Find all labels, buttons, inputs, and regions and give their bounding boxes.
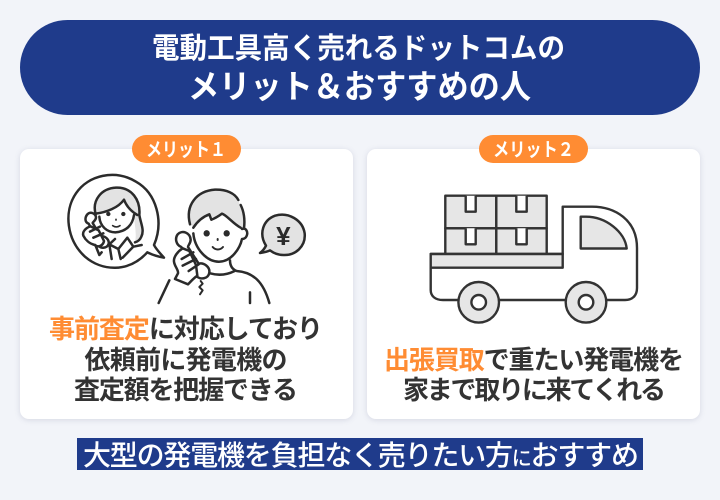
icon: man on the phone: [159, 190, 269, 303]
panel: merit 2: [367, 135, 700, 419]
rear wheel: [566, 282, 606, 323]
header banner: [20, 20, 700, 115]
truck bed: [431, 254, 563, 268]
cargo boxes: [445, 196, 547, 254]
text: merit 2 description: [384, 345, 684, 405]
recommendation banner: 大型の発電機を負担なく売りたい方におすすめ: [83, 440, 639, 471]
text: merit 2 description: 家まで取りに来てくれる: [403, 375, 666, 405]
badge: merit 1: メリット１: [146, 140, 226, 161]
text: merit 1 description: 依頼前に発電機の: [84, 345, 288, 375]
title line 2: メリット＆おすすめの人: [188, 68, 531, 105]
text: merit 1 description: 査定額を把握できる: [74, 375, 298, 405]
title line 1: 電動工具高く売れるドットコムの: [152, 32, 565, 65]
illustration: phone consultation: [68, 175, 305, 303]
truck body: [431, 207, 637, 300]
panel: merit 1: [20, 135, 353, 419]
icon: speech bubble with operator: [68, 175, 164, 268]
illustration: delivery truck: [431, 196, 637, 323]
text: merit 1 description: [49, 314, 323, 405]
cab window: [581, 217, 627, 248]
icon: yen speech bubble: ¥: [276, 221, 291, 251]
badge: merit 2: [479, 135, 588, 163]
icon: yen speech bubble: [260, 215, 305, 255]
text: merit 2 description: 出張買取で重たい発電機を: [384, 345, 684, 375]
badge: merit 2: メリット２: [493, 140, 574, 161]
text: merit 1 description: 事前査定に対応しており: [49, 314, 323, 344]
front wheel: [458, 282, 499, 323]
badge: merit 1: [132, 135, 241, 163]
